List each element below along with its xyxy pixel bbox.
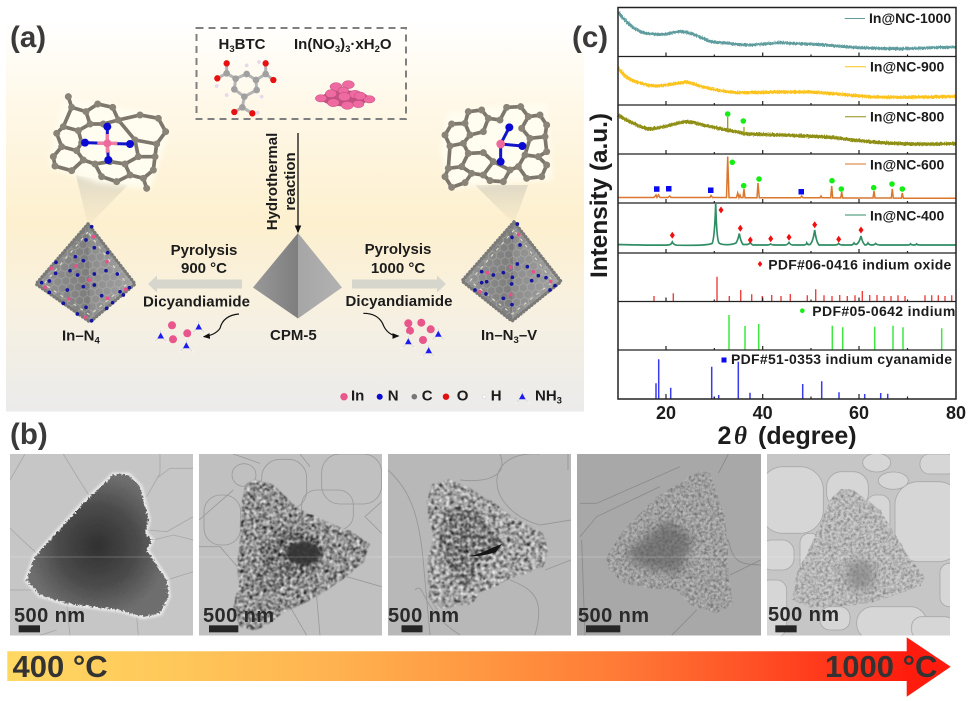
series labels: In@NC-1000 — [869, 10, 951, 26]
series labels: In@NC-800 — [870, 109, 945, 125]
reference sticks: PDF 06-0416 — [654, 277, 952, 301]
indium nitrate label: O — [380, 36, 392, 53]
right reaction conditions: 1000 °C — [371, 260, 425, 277]
label (b): (b) — [10, 418, 48, 451]
icon: In-N3-V lattice fragment — [442, 103, 552, 188]
atom legend: In — [351, 388, 364, 405]
reference sticks: PDF 05-0642 — [729, 315, 942, 350]
arrow: precursors to CPM-5 — [297, 133, 299, 232]
peak markers: indium cyanamide (blue squares) — [654, 186, 804, 194]
panel (a) background — [6, 20, 584, 412]
arrow: to In-N3-V — [352, 276, 446, 292]
Hydrothermal reaction vertical label: reaction — [282, 152, 299, 211]
icon: left In atoms and NH3 — [153, 319, 206, 353]
curved arrow right — [363, 313, 398, 336]
atom legend: NH — [535, 388, 557, 405]
faint stitching line — [10, 556, 950, 558]
H3BTC label: BTC — [235, 36, 266, 53]
x axis title: θ — [734, 423, 747, 450]
light cone right — [475, 185, 528, 224]
peak markers: indium oxide (red diamonds) — [670, 206, 864, 244]
TEM image 900 C — [577, 454, 761, 636]
reference sticks: PDF 51-0353 — [656, 359, 888, 399]
TEM image 600 C — [199, 454, 382, 636]
series labels: In@NC-600 — [870, 156, 945, 172]
scale bar — [209, 625, 238, 632]
scale label: 500 nm — [578, 605, 649, 627]
atom legend: O — [457, 388, 469, 405]
right reaction conditions — [346, 241, 452, 310]
icon: right In atoms and NH3 — [401, 319, 446, 358]
temperature arrow — [7, 637, 951, 697]
reference label: indium: PDF#05-0642 indium — [812, 303, 955, 319]
left reaction conditions: Pyrolysis — [171, 242, 237, 259]
scale label: 500 nm — [388, 605, 459, 627]
series labels: In@NC-900 — [870, 59, 945, 75]
series labels: In@NC-400 — [870, 208, 945, 224]
XRD curve In@NC-800 — [618, 115, 956, 144]
XRD curve In@NC-400 — [618, 204, 956, 245]
indium nitrate label: 3 — [345, 44, 350, 55]
icon: CPM-5 octahedron — [253, 233, 342, 318]
H3BTC label: H — [218, 36, 229, 53]
XRD curve In@NC-600 — [618, 156, 956, 198]
right reaction conditions: Dicyandiamide — [346, 293, 452, 310]
In@NC-800 indium peaks — [728, 117, 744, 134]
CPM-5 label: CPM-5 — [270, 327, 317, 344]
x axis tick labels: 60 — [849, 403, 869, 423]
light cone left — [76, 175, 128, 226]
arrow: to In-N4 — [148, 276, 242, 292]
plot frame with dividers and ticks — [618, 8, 956, 399]
x axis title: 2 — [718, 422, 731, 450]
x axis tick labels: 40 — [753, 403, 773, 423]
XRD curve In@NC-1000 — [618, 12, 956, 49]
label (c): (c) — [572, 21, 608, 54]
In-N3-V label: 3 — [514, 335, 519, 346]
icon: In-N4 lattice fragment — [50, 97, 168, 188]
peak markers: indium (green dots) — [725, 111, 905, 192]
dashed precursor box — [196, 28, 406, 119]
Hydrothermal reaction vertical label: Hydrothermal — [264, 133, 281, 230]
atom legend: H — [491, 388, 502, 405]
TEM image 800 C — [388, 454, 571, 636]
left reaction conditions: 900 °C — [181, 260, 227, 277]
icon: H3BTC molecule — [217, 62, 273, 113]
arrow body — [7, 637, 951, 697]
scale bar — [402, 625, 422, 632]
label (a): (a) — [10, 21, 46, 54]
panel (b): TEM images — [10, 418, 962, 640]
scale label: 500 nm — [203, 605, 274, 627]
scale label: 500 nm — [768, 604, 839, 626]
atom legend: N — [388, 388, 399, 405]
indium nitrate label: 3 — [335, 44, 340, 55]
y axis title: Intensity (a.u.) — [586, 113, 613, 278]
400 C label: 400 °C — [12, 649, 108, 684]
atom legend — [340, 388, 562, 407]
indium nitrate label: ·xH — [350, 36, 375, 53]
scale bar — [19, 625, 40, 632]
In-N4 label: In–N — [62, 328, 95, 344]
indium nitrate label: In(NO — [294, 36, 335, 53]
left reaction conditions: Dicyandiamide — [143, 294, 250, 310]
panel (c): XRD patterns — [572, 8, 966, 450]
indium nitrate label: 2 — [375, 44, 380, 55]
XRD curve In@NC-900 — [618, 68, 956, 97]
atom legend: 3 — [557, 396, 562, 407]
In-N4 label: 4 — [95, 336, 101, 346]
reference label: indium cyanamide: PDF#51-0353 indium cyanamide — [731, 351, 952, 367]
panel (a): synthesis scheme — [6, 20, 584, 412]
1000 C label: 1000 °C — [825, 649, 937, 684]
Hydrothermal reaction vertical label — [264, 133, 299, 230]
icon: indium cluster — [315, 81, 375, 109]
reference label: indium oxide: PDF#06-0416 indium oxide — [768, 256, 952, 272]
icon: In-N3-V porous octahedron — [462, 222, 561, 321]
TEM image 1000 C — [767, 454, 950, 636]
right reaction conditions: Pyrolysis — [365, 241, 431, 258]
H3BTC label: 3 — [229, 44, 235, 55]
x axis tick labels: 20 — [656, 403, 676, 423]
x axis title: (degree) — [758, 422, 857, 450]
x axis tick labels: 80 — [946, 403, 966, 423]
curved arrow left — [204, 314, 239, 337]
series labels — [845, 10, 951, 224]
left reaction conditions — [143, 242, 250, 310]
icon: In-N4 porous octahedron — [36, 224, 135, 322]
x axis tick labels — [656, 403, 966, 423]
In-N3-V label: –V — [519, 327, 537, 344]
atom legend: C — [422, 388, 433, 405]
In-N3-V label: In–N — [481, 327, 514, 344]
indium nitrate label: ) — [340, 36, 345, 53]
TEM image 400 C — [10, 454, 193, 636]
scale label: 500 nm — [14, 605, 85, 627]
